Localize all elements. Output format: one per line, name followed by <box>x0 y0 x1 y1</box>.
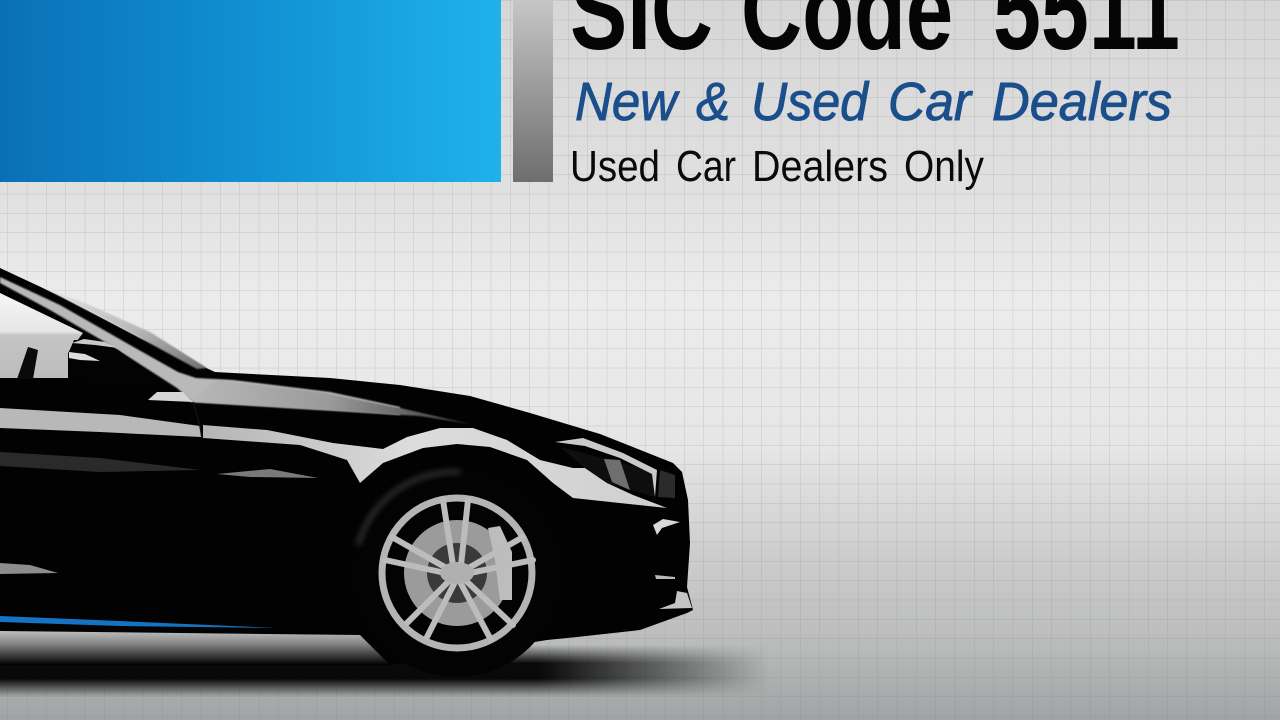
side window <box>0 293 83 378</box>
window post <box>17 347 38 379</box>
brake disc <box>404 520 510 626</box>
rim <box>382 498 532 648</box>
bumper highlights <box>653 519 692 609</box>
wing mirror <box>68 339 160 385</box>
subtitle: New <box>575 72 680 132</box>
title <box>570 0 1180 73</box>
subtitle: Car <box>888 72 973 132</box>
caption <box>570 142 984 191</box>
door shoulder highlight <box>0 408 201 437</box>
tyre <box>353 469 561 677</box>
caption: Only <box>904 142 984 191</box>
blue header panel <box>0 0 501 182</box>
caption: Dealers <box>752 142 888 191</box>
body crease highlight <box>217 469 318 478</box>
spokes <box>385 500 533 638</box>
fender highlight <box>203 425 667 508</box>
grey accent bar <box>513 0 553 182</box>
subtitle: Dealers <box>992 72 1172 132</box>
windshield edge <box>42 287 207 369</box>
hood reflection <box>190 380 470 424</box>
lower door reflection <box>0 452 200 472</box>
door shut line <box>193 402 202 438</box>
subtitle: & <box>696 72 730 132</box>
subtitle <box>575 72 1172 132</box>
car body silhouette <box>0 268 693 665</box>
headlight <box>555 438 675 498</box>
front wheel <box>353 469 561 677</box>
blue side stripe <box>0 616 276 628</box>
caption: Used <box>570 142 660 191</box>
brake hub <box>427 543 487 603</box>
door handle highlight <box>148 392 193 402</box>
A-pillar and hood highlight <box>0 277 400 415</box>
rocker accent <box>0 563 58 574</box>
subtitle: Used <box>751 72 870 132</box>
wheel centre cap <box>440 562 474 584</box>
tyre sheen <box>358 472 460 545</box>
illustration: black car <box>0 268 693 677</box>
brake caliper <box>488 526 512 600</box>
side sill <box>0 631 390 665</box>
ground shadow <box>0 645 770 697</box>
caption: Car <box>676 142 736 191</box>
